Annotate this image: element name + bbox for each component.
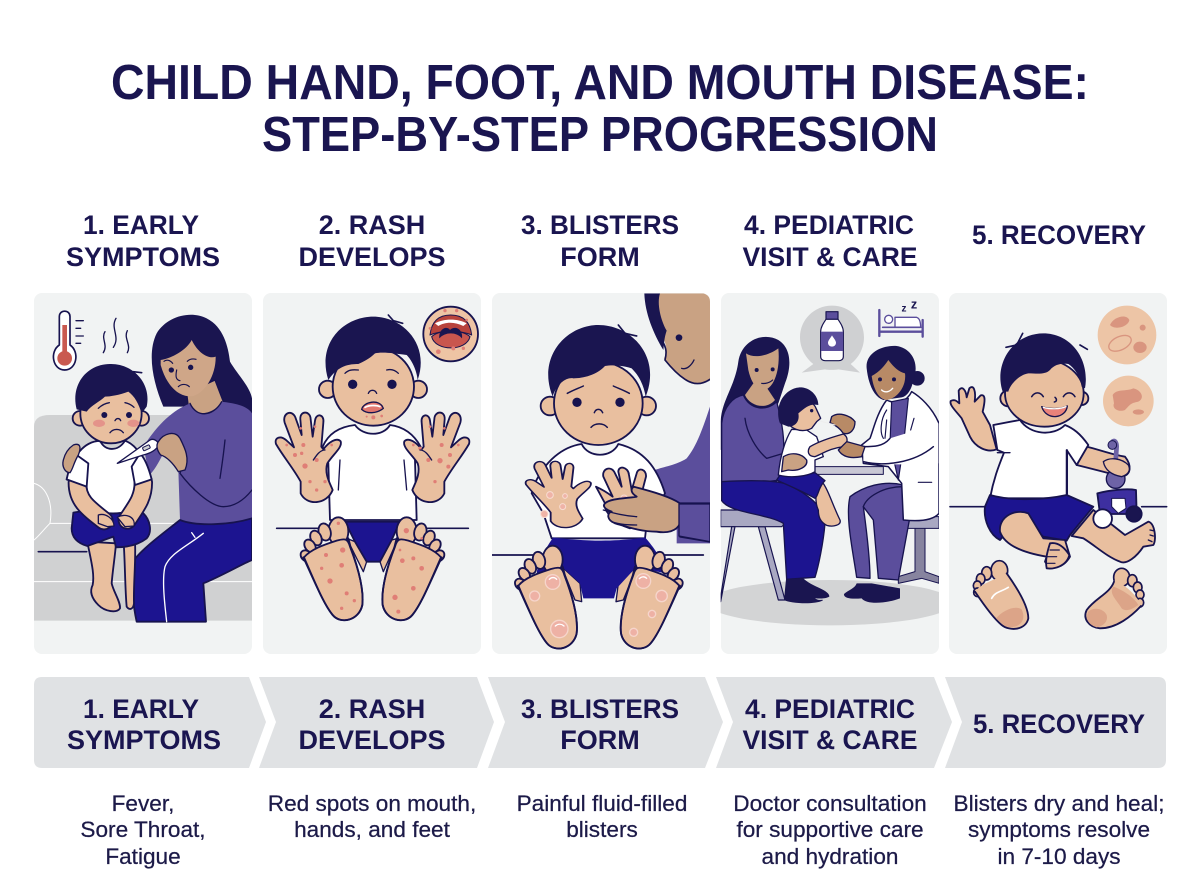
- step descriptions: and hydration: [762, 844, 898, 869]
- child ears: [72, 410, 82, 427]
- step headings: 3. BLISTERS: [521, 210, 679, 240]
- panel: pediatric visit illustration: [720, 302, 939, 626]
- child's head: [783, 402, 821, 431]
- step descriptions: in 7-10 days: [997, 844, 1121, 869]
- child left arm: [77, 483, 104, 521]
- shorts: [985, 495, 1093, 541]
- mother's hand on shoulder: [63, 444, 80, 473]
- child's shorts: [777, 473, 825, 498]
- doctor's arm: [863, 423, 938, 464]
- child shorts: [72, 511, 150, 547]
- doctor's shoes: [844, 583, 900, 603]
- title: STEP-BY-STEP PROGRESSION: [262, 108, 938, 162]
- step headings: DEVELOPS: [298, 242, 446, 272]
- child's right hand blisters: [596, 468, 646, 528]
- child right arm: [127, 483, 143, 520]
- shorts: [345, 522, 400, 562]
- panel backgrounds: [34, 293, 1167, 654]
- title: [111, 56, 1089, 162]
- step headings: 1. EARLY: [83, 210, 199, 240]
- child face: [80, 383, 142, 443]
- right healed foot: [1085, 568, 1144, 628]
- chevron labels: SYMPTOMS: [67, 725, 221, 755]
- extended leg: [1072, 510, 1155, 562]
- arm holding toy: [1077, 447, 1130, 477]
- step headings: 5. RECOVERY: [972, 220, 1146, 250]
- step descriptions: Fever,: [112, 791, 174, 816]
- floor line: [492, 554, 704, 556]
- left foot with blisters: [513, 546, 577, 649]
- child face: [554, 362, 643, 445]
- chevron labels: DEVELOPS: [298, 725, 446, 755]
- shorts: [537, 537, 665, 598]
- child facial features: [572, 398, 582, 407]
- right foot with spots: [382, 517, 447, 620]
- icon: speech bubble with water bottle: [800, 306, 864, 373]
- mother's hand: [604, 487, 710, 542]
- child's shirt: [778, 429, 823, 477]
- child shirt: [67, 441, 152, 513]
- bent leg: [1000, 512, 1070, 567]
- left healed foot: [973, 561, 1028, 629]
- icon: heat waves: [103, 318, 129, 353]
- doctor's spoon hand: [830, 414, 855, 434]
- mother jeans: [131, 518, 252, 622]
- shirt: [990, 420, 1088, 498]
- step descriptions: hands, and feet: [294, 817, 451, 842]
- waving arm: [950, 387, 997, 451]
- child's arm and doctor's hand: [808, 434, 847, 457]
- child hands on knees: [98, 514, 134, 527]
- facial features: [348, 380, 357, 389]
- mother's hair: [721, 337, 789, 450]
- left hand with spots: [276, 413, 341, 502]
- step headings: FORM: [560, 242, 640, 272]
- chevron labels: 5. RECOVERY: [973, 709, 1145, 739]
- mother face: [658, 293, 710, 384]
- doctor's coat: [862, 392, 939, 521]
- mother sweater: [143, 402, 252, 524]
- chevron labels: 3. BLISTERS: [521, 694, 679, 724]
- child hair: [75, 364, 147, 413]
- step descriptions: Blisters dry and heal;: [954, 791, 1164, 816]
- mother's arm: [655, 407, 710, 543]
- mother's jeans: [722, 481, 825, 579]
- step descriptions: Fatigue: [105, 844, 181, 869]
- couch: [34, 415, 252, 621]
- thermometer in mouth: [117, 439, 158, 463]
- ears: [319, 381, 427, 398]
- chevron bar: [34, 677, 1166, 768]
- step descriptions: Red spots on mouth,: [268, 791, 476, 816]
- mother hair: [152, 314, 252, 414]
- step descriptions: Doctor consultation: [733, 791, 927, 816]
- panel: rash develops illustration: [276, 307, 478, 620]
- step headings: 4. PEDIATRIC: [744, 210, 914, 240]
- right foot with blisters: [621, 546, 685, 649]
- mother's sweater: [722, 395, 784, 482]
- healing skin circle top: [1098, 306, 1156, 364]
- legs behind feet: [562, 567, 637, 602]
- hair: [1000, 333, 1086, 392]
- icon: bed with zzz: [879, 298, 923, 337]
- shirt: [323, 425, 421, 520]
- chevron labels: 4. PEDIATRIC: [745, 694, 915, 724]
- doctor's legs: [848, 483, 910, 580]
- step headings: VISIT & CARE: [742, 242, 918, 272]
- child sleeves: [67, 453, 152, 487]
- panel: blisters form illustration: [492, 293, 710, 649]
- mother hair: [644, 293, 667, 350]
- chevron labels: 1. EARLY: [83, 694, 199, 724]
- hair: [326, 317, 421, 380]
- child shirt: [532, 444, 665, 538]
- chevron labels: FORM: [560, 725, 640, 755]
- right hand with spots: [404, 413, 469, 502]
- child's left hand blisters: [526, 461, 591, 528]
- child far leg: [123, 538, 135, 609]
- chevron labels: [67, 694, 1145, 755]
- child ears: [541, 397, 656, 415]
- smile: [1032, 393, 1075, 402]
- mother's hand on child: [782, 454, 807, 472]
- icon: mouth sores: [423, 307, 478, 361]
- step headings: 2. RASH: [319, 210, 425, 240]
- icon: thermometer: [53, 311, 83, 370]
- icon: bed with zzz: z: [911, 298, 917, 312]
- title: CHILD HAND, FOOT, AND MOUTH DISEASE:: [111, 56, 1089, 110]
- face: [333, 348, 414, 426]
- mother neck and face: [187, 380, 223, 414]
- step descriptions: [80, 791, 1164, 869]
- step descriptions: for supportive care: [736, 817, 924, 842]
- step descriptions: Painful fluid-filled: [517, 791, 687, 816]
- panel: early symptoms illustration: [34, 311, 252, 622]
- panel: recovery illustration: [950, 306, 1167, 629]
- chevron labels: VISIT & CARE: [742, 725, 918, 755]
- mother's neck/face: [746, 348, 779, 390]
- child near leg: [87, 542, 120, 611]
- icon: bed with zzz: z: [901, 304, 906, 315]
- mother's stool: [721, 510, 786, 602]
- doctor's head: [910, 371, 925, 386]
- face: [1005, 360, 1084, 427]
- step headings: SYMPTOMS: [66, 242, 220, 272]
- toy: [1093, 441, 1142, 528]
- ears: [1000, 390, 1088, 406]
- floor line: [277, 526, 468, 531]
- left foot with spots: [298, 517, 363, 620]
- healing skin circle bottom: [1103, 376, 1154, 426]
- child's leg: [816, 478, 840, 526]
- doctor's stool: [893, 517, 939, 583]
- mother's shoes: [784, 578, 829, 603]
- step descriptions: Sore Throat,: [80, 817, 206, 842]
- legs behind feet: [347, 538, 398, 572]
- child hair: [548, 325, 650, 397]
- floor line: [950, 504, 1167, 509]
- step descriptions: symptoms resolve: [968, 817, 1150, 842]
- step headings: [66, 210, 1146, 272]
- table: [815, 467, 883, 474]
- chevron labels: 2. RASH: [319, 694, 425, 724]
- floor shadow: [720, 580, 939, 626]
- step descriptions: blisters: [566, 817, 638, 842]
- mother's hand: [157, 434, 187, 472]
